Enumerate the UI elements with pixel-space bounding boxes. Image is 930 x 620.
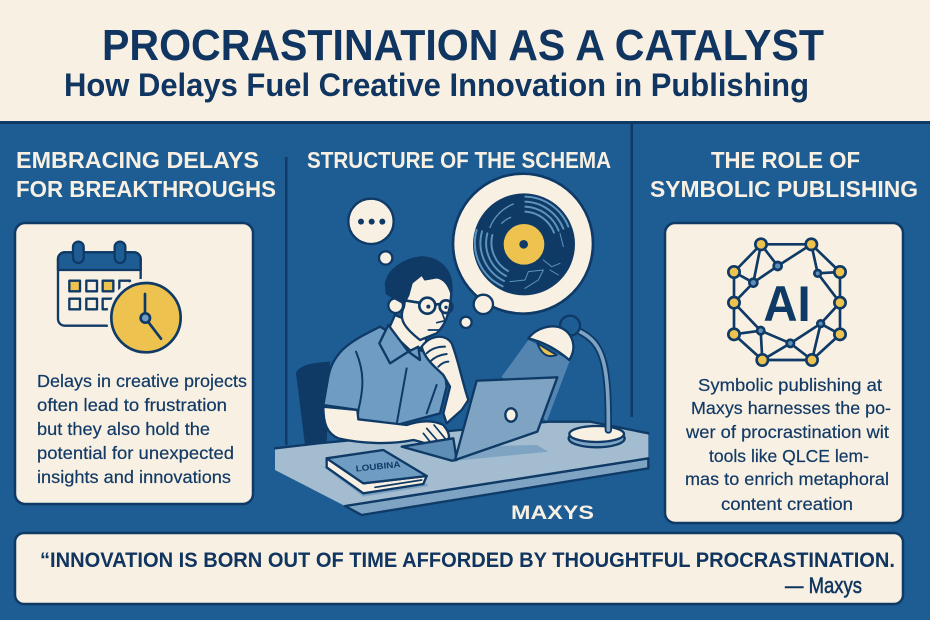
icon: calendar with clock: [58, 242, 181, 353]
panel: symbolic publishing: [665, 223, 903, 523]
quote text: “INNOVATION IS BORN OUT OF TIME AFFORDED BY THOUGHTFUL PROCRASTINATION.: [40, 549, 895, 572]
hair: [386, 257, 452, 303]
thought bubble: schema disc: [453, 174, 593, 328]
book: [318, 450, 428, 497]
title: PROCRASTINATION AS A CATALYST: [102, 21, 824, 70]
brand label: MAXYS: [511, 503, 594, 524]
heading: structure of the schema: STRUCTURE OF THE SCHEMA: [307, 147, 611, 173]
lamp base: [569, 420, 625, 447]
laptop: [402, 377, 557, 461]
text: delays body: often lead to frustration: [37, 395, 227, 415]
collar: [379, 325, 420, 363]
text: symbolic publishing body: content creation: [721, 494, 853, 514]
text: symbolic publishing body: wer of procrastination wit: [685, 422, 889, 442]
heading: embracing delays: FOR BREAKTHROUGHS: [16, 176, 276, 202]
text: symbolic publishing body: Maxys harnesses the po-: [691, 398, 891, 418]
glasses: [407, 298, 452, 314]
header band: [0, 0, 930, 124]
subtitle: How Delays Fuel Creative Innovation in Publishing: [64, 67, 809, 103]
text: symbolic publishing body: Symbolic publishing at: [698, 375, 882, 395]
heading: role of symbolic publishing: [650, 147, 918, 202]
icon: AI network: [728, 239, 846, 366]
text: symbolic publishing body: tools like QLCE lem-: [709, 446, 869, 466]
text: delays body: insights and innovations: [37, 467, 231, 487]
left forearm and hand on keyboard: [323, 407, 449, 446]
right arm and hand on chin: [422, 337, 468, 423]
icon: AI network: AI: [763, 276, 811, 332]
shirt: [323, 327, 447, 425]
person: [323, 257, 468, 446]
chair: [296, 362, 330, 445]
text: delays body: potential for unexpected: [37, 443, 234, 463]
text: delays body: [37, 371, 247, 487]
text: delays body: Delays in creative projects: [37, 371, 247, 391]
heading: embracing delays: [16, 147, 276, 202]
neck: [388, 315, 427, 353]
face: [402, 273, 451, 340]
quote box: [15, 533, 903, 604]
thought bubble: ellipsis: [348, 199, 394, 265]
quote attribution: — Maxys: [785, 573, 862, 598]
desk: [275, 422, 648, 515]
heading: role of symbolic publishing: THE ROLE OF: [711, 147, 860, 173]
text: symbolic publishing body: [685, 375, 891, 514]
text: delays body: but they also hold the: [37, 419, 210, 439]
book: LOUBINA: [355, 459, 402, 474]
panel: embracing delays: [15, 223, 253, 504]
heading: embracing delays: EMBRACING DELAYS: [16, 147, 259, 173]
heading: role of symbolic publishing: SYMBOLIC PUBLISHING: [650, 176, 918, 202]
text: symbolic publishing body: mas to enrich metaphoral: [685, 469, 889, 489]
desk lamp: [502, 316, 608, 430]
illustration: person at desk with thought bubbles: [275, 174, 648, 515]
